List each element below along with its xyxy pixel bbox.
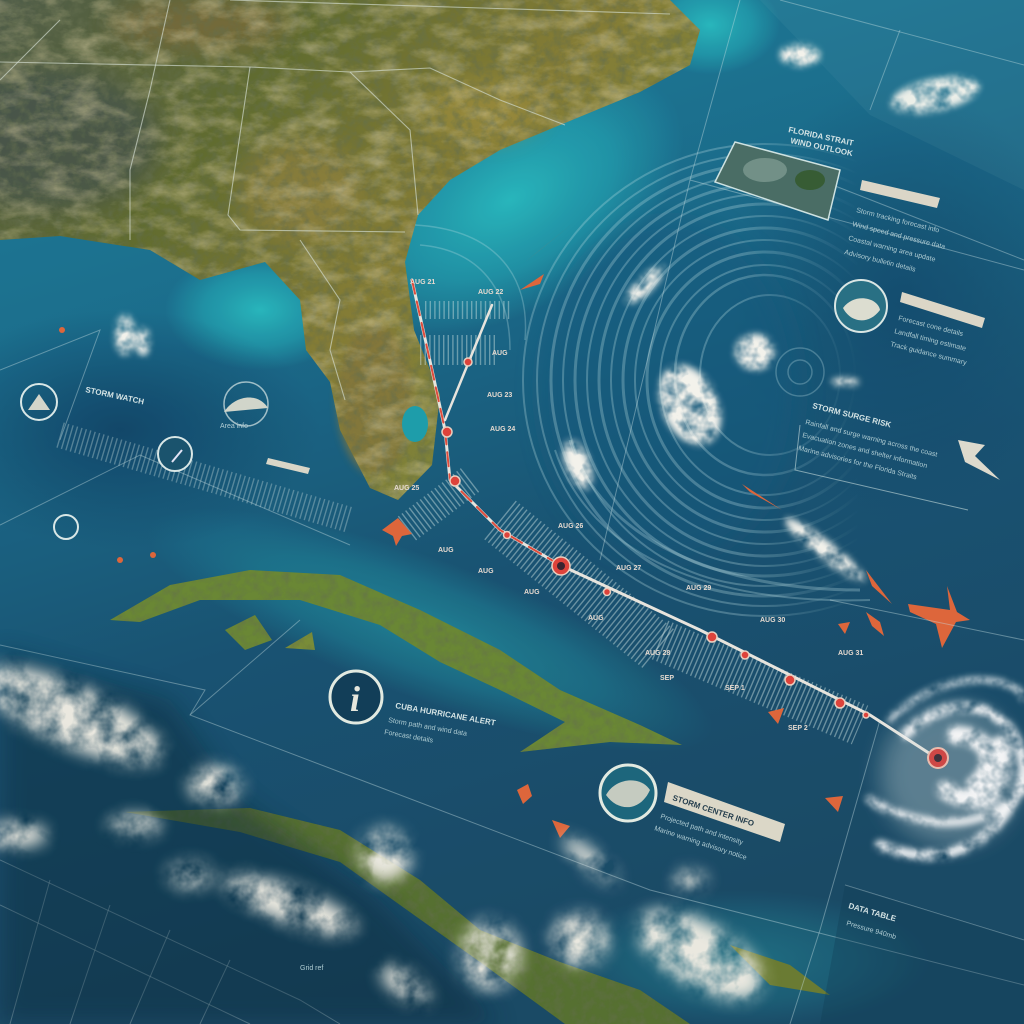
plane markers xyxy=(59,224,970,838)
lower left cloud cover xyxy=(0,647,777,1024)
state borders xyxy=(0,0,670,442)
panel: right text block xyxy=(795,401,1000,510)
panel: upper right labels: Wind speed and pressure data xyxy=(852,221,946,251)
panel: left legend: Area info xyxy=(220,423,248,430)
globe callout bottom xyxy=(600,765,785,862)
map: mainland land mass xyxy=(0,0,720,510)
info icon callout: i xyxy=(350,679,360,719)
info icon callout xyxy=(330,671,496,745)
panel: upper right labels xyxy=(788,125,946,274)
map: Cuba island xyxy=(110,570,682,752)
storm swirl rings xyxy=(415,143,870,617)
panel: left legend xyxy=(21,382,310,539)
panel: upper right labels: Advisory bulletin details xyxy=(844,249,917,274)
track date labels: AUG 31 xyxy=(838,650,863,657)
panel: right globe callout: Track guidance summary xyxy=(890,341,968,367)
track date labels: AUG xyxy=(478,568,494,575)
globe callout bottom: STORM CENTER INFO xyxy=(671,793,755,828)
panel: right globe callout: Landfall timing estimate xyxy=(894,328,967,353)
panel: bottom right data box xyxy=(820,885,1024,1024)
track date labels: AUG xyxy=(524,589,540,596)
track date labels: SEP 2 xyxy=(788,725,808,732)
forecast track line xyxy=(412,280,935,757)
track date labels: AUG xyxy=(492,350,508,357)
track date labels: SEP 1 xyxy=(725,685,745,692)
panel: top right satellite views xyxy=(715,0,1024,220)
track date labels xyxy=(394,279,863,732)
track date labels: AUG 25 xyxy=(394,485,419,492)
panel: bottom right data box: Pressure 940mb xyxy=(845,920,897,941)
track date labels: AUG 22 xyxy=(478,289,503,296)
track date labels: AUG xyxy=(438,547,454,554)
globe callout bottom: Marine warning advisory notice xyxy=(653,825,747,862)
track date labels: AUG 26 xyxy=(558,523,583,530)
info icon callout: Forecast details xyxy=(384,729,434,745)
panel: right globe callout: Forecast cone details xyxy=(898,315,964,338)
track date labels: AUG 27 xyxy=(616,565,641,572)
panel: upper right labels: FLORIDA STRAIT xyxy=(788,125,854,148)
track date labels: AUG 29 xyxy=(686,585,711,592)
info icon callout: Storm path and wind data xyxy=(388,717,468,738)
track date labels: AUG 21 xyxy=(410,279,435,286)
track date labels: AUG 30 xyxy=(760,617,785,624)
globe callout bottom: Projected path and intensity xyxy=(659,813,744,847)
panel: upper right labels: Storm tracking forecast info xyxy=(856,207,940,235)
map: southern island xyxy=(118,571,830,1024)
track date labels: AUG 28 xyxy=(645,650,670,657)
panel: bottom right data box: DATA TABLE xyxy=(847,901,898,924)
track date labels: SEP xyxy=(660,675,674,682)
hurricane xyxy=(870,680,1024,855)
dashed storm surge bands xyxy=(60,310,860,725)
satellite thumbnail xyxy=(715,142,840,220)
track date labels: AUG 24 xyxy=(490,426,515,433)
panel: left legend: STORM WATCH xyxy=(85,385,145,406)
panel: right text block: Evacuation zones and shelter information xyxy=(802,432,928,470)
panel: right text block: STORM SURGE RISK xyxy=(812,401,892,430)
info icon callout: CUBA HURRICANE ALERT xyxy=(395,701,496,728)
panel: right text block: Rainfall and surge warning across the coast xyxy=(805,419,938,459)
panel: upper right labels: WIND OUTLOOK xyxy=(790,136,854,158)
track date labels: AUG xyxy=(588,615,604,622)
panel: right text block: Marine advisories for the Florida Straits xyxy=(798,445,918,482)
storm cloud bands xyxy=(115,44,982,588)
track date labels: AUG 23 xyxy=(487,392,512,399)
panel: right globe callout xyxy=(835,280,985,367)
lower left cloud cover: Grid ref xyxy=(300,965,323,972)
panel: upper right labels: Coastal warning area update xyxy=(848,235,936,264)
